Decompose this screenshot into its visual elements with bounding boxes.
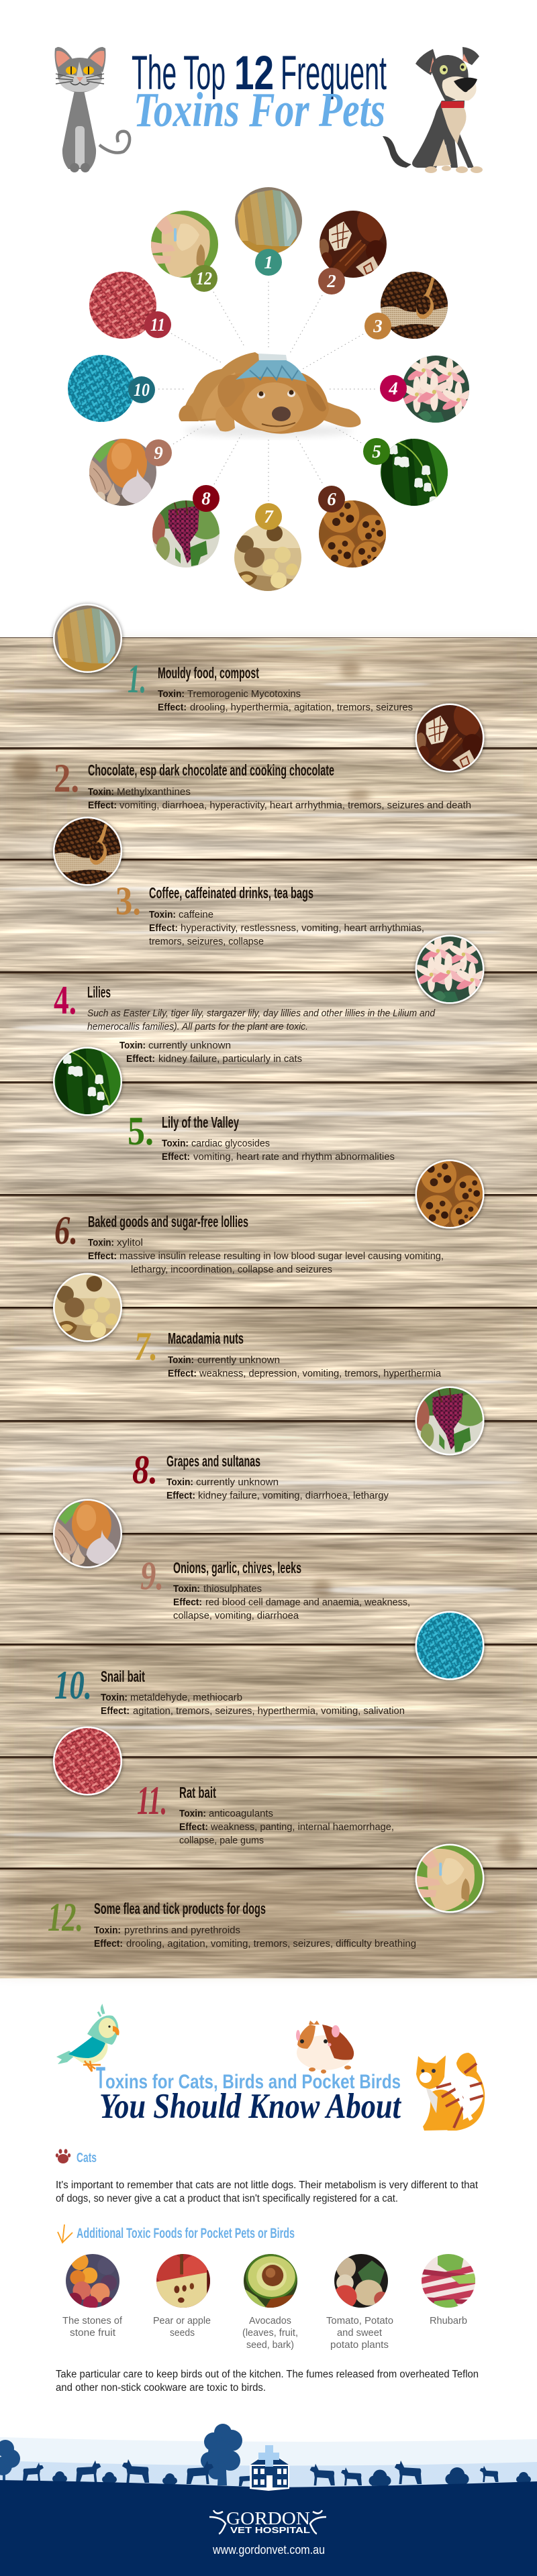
item 8: grapes text: Grapes and sultanas — [166, 1452, 260, 1470]
item 6: baked goods text: xylitol — [117, 1237, 143, 1248]
photo wheel: toxin 5 lily of the valley — [363, 438, 448, 506]
caption — [242, 2315, 298, 2351]
caption: seeds — [170, 2327, 195, 2339]
icon: grey cat — [55, 47, 130, 172]
badge 1: 1 — [264, 252, 273, 272]
item 1: mouldy food text: Mouldy food, compost — [158, 664, 259, 682]
item 10: snail bait text: 10. — [54, 1663, 92, 1707]
item 4: lilies text: Lilies — [87, 983, 111, 1001]
caption: and sweet — [337, 2327, 383, 2339]
item 10: snail bait text: Toxin: — [101, 1692, 128, 1703]
item 2: chocolate text: Chocolate, esp dark chocolate and cooking chocolate — [88, 761, 334, 779]
badge 7: 7 — [264, 506, 274, 527]
heading: additional toxic foods: Additional Toxic Foods for Pocket Pets or Birds — [77, 2226, 295, 2241]
item 10: snail bait text: agitation, tremors, seizures, hyperthermia, vomiting, salivation — [133, 1705, 405, 1717]
item 10: snail bait text — [54, 1663, 405, 1717]
item 3: coffee text: caffeine — [179, 909, 213, 920]
item 2: chocolate text: 2. — [54, 756, 79, 800]
caption: The stones of — [62, 2315, 123, 2326]
item 6: baked goods text: massive insulin release resulting in low blood sugar level causing vomiting, — [119, 1250, 444, 1262]
item 11: rat bait text: Effect: — [179, 1821, 208, 1833]
item 1: mouldy food text: Toxin: — [158, 688, 185, 700]
item 12: flea and tick text: Toxin: — [94, 1925, 121, 1936]
icon: orange bird foot — [58, 2224, 72, 2243]
section heading: T — [96, 2061, 105, 2095]
photo: chocolate — [415, 699, 485, 773]
logo: Gordon Vet Hospital: GORDON — [226, 2508, 310, 2528]
item 9: onions text: thiosulphates — [203, 1583, 262, 1595]
icon: orange cat — [416, 2053, 485, 2131]
item 8: grapes text: kidney failure, vomiting, diarrhoea, lethargy — [198, 1490, 389, 1501]
item 7: macadamia text: weakness, depression, vomiting, tremors, hyperthermia — [199, 1368, 442, 1379]
item 11: rat bait text: anticoagulants — [209, 1808, 273, 1819]
photo: grapes — [415, 1386, 487, 1456]
logo: Gordon Vet Hospital: VET HOSPITAL — [230, 2525, 310, 2535]
item 2: chocolate text: Methylxanthines — [117, 786, 191, 798]
item 5: lily of the valley text: Effect: — [162, 1151, 190, 1163]
caption — [326, 2315, 393, 2351]
item 12: flea and tick text: pyrethrins and pyrethroids — [124, 1925, 240, 1936]
food: apple seeds — [153, 2254, 213, 2339]
illustration: sick dog with ice pack — [179, 352, 360, 437]
photo wheel: toxin 2 chocolate — [318, 205, 389, 294]
photo wheel: toxin 8 grapes — [150, 485, 224, 568]
item 2: chocolate text: Effect: — [88, 800, 117, 811]
photo wheel: toxin 12 flea products — [151, 211, 218, 292]
text: birds warning — [56, 2369, 479, 2394]
title: 12 — [234, 47, 274, 100]
item 3: coffee text: Toxin: — [149, 909, 176, 920]
icon: large tree — [201, 2424, 242, 2485]
item 6: baked goods text: Baked goods and sugar-free lollies — [88, 1213, 248, 1230]
caption: Avocados — [249, 2315, 291, 2326]
item 8: grapes text: currently unknown — [196, 1477, 279, 1488]
caption: stone fruit — [70, 2327, 116, 2339]
item 10: snail bait text: metaldehyde, methiocarb — [130, 1692, 242, 1703]
item 11: rat bait text — [137, 1778, 394, 1846]
item 5: lily of the valley text: 5. — [128, 1109, 154, 1153]
badge 12: 12 — [196, 268, 212, 288]
heading: cats: Cats — [77, 2151, 97, 2165]
icon: left tree — [0, 2440, 20, 2482]
item 9: onions text: Effect: — [173, 1597, 202, 1608]
item 6: baked goods text: Effect: — [88, 1250, 117, 1262]
item 12: flea and tick text: drooling, agitation, vomiting, tremors, seizures, difficulty breathing — [126, 1938, 416, 1949]
food: tomato and potato — [326, 2254, 393, 2351]
title — [132, 47, 387, 137]
item 1: mouldy food text: drooling, hyperthermia, agitation, tremors, seizures — [190, 702, 413, 713]
photo: onions — [53, 1499, 122, 1568]
badge 4: 4 — [388, 378, 398, 398]
item 3: coffee text: tremors, seizures, collapse — [149, 936, 264, 947]
badge 8: 8 — [201, 488, 211, 508]
caption — [153, 2315, 211, 2339]
item 9: onions text: 9. — [140, 1554, 164, 1598]
item 5: lily of the valley text: Lily of the Valley — [162, 1114, 239, 1131]
badge 9: 9 — [154, 443, 163, 463]
text: birds warning: and other non-stick cookware are toxic to birds. — [56, 2382, 266, 2394]
item 7: macadamia text: currently unknown — [197, 1354, 280, 1366]
photo: snail bait — [415, 1611, 485, 1680]
photo: flea and tick products — [415, 1843, 485, 1913]
photo wheel: toxin 4 lilies — [380, 352, 476, 423]
photo wheel: toxin 6 baked goods — [318, 486, 389, 573]
section heading — [96, 2061, 402, 2126]
website url: www.gordonvet.com.au — [212, 2543, 325, 2557]
item 9: onions text: red blood cell damage and anaemia, weakness, — [205, 1597, 410, 1608]
item 10: snail bait text: Effect: — [101, 1705, 130, 1717]
photo: coffee — [53, 817, 122, 885]
icon: parrot — [56, 2006, 119, 2072]
item 7: macadamia text: Macadamia nuts — [168, 1330, 244, 1347]
item 7: macadamia text — [134, 1324, 442, 1379]
caption: Tomato, Potato — [326, 2315, 393, 2326]
item 4: lilies text — [54, 978, 436, 1065]
item 6: baked goods text: lethargy, incoordination, collapse and seizures — [131, 1264, 332, 1275]
badge 11: 11 — [150, 315, 165, 335]
toxin wheel connectors — [158, 282, 376, 501]
item 2: chocolate text: vomiting, diarrhoea, hyperactivity, heart arrhythmia, tremors, seizures and death — [119, 800, 471, 811]
item 2: chocolate text: Toxin: — [88, 786, 114, 798]
item 8: grapes text: Effect: — [166, 1490, 195, 1501]
item 12: flea and tick text — [48, 1895, 416, 1949]
item 4: lilies text: Such as Easter Lily, tiger lily, stargazer lily, day lillies and other lillies in the Lilium and — [87, 1008, 436, 1019]
item 8: grapes text — [132, 1448, 389, 1501]
item 9: onions text: collapse, vomiting, diarrhoea — [173, 1610, 299, 1621]
item 7: macadamia text: Effect: — [168, 1368, 197, 1379]
item 1: mouldy food text: 1. — [128, 657, 146, 701]
food: avocado — [242, 2254, 298, 2351]
caption: Rhubarb — [430, 2315, 467, 2326]
item 6: baked goods text — [54, 1208, 444, 1275]
food: rhubarb — [422, 2254, 475, 2326]
caption — [62, 2315, 123, 2339]
text: cats paragraph: It's important to remember that cats are not little dogs. Their metabolism is very different to that — [56, 2180, 479, 2191]
item 10: snail bait text: Snail bait — [101, 1668, 145, 1685]
icon: guinea pig — [296, 2021, 354, 2074]
icon: black and tan dog — [383, 47, 483, 173]
badge 5: 5 — [372, 441, 381, 462]
food: stone fruit — [62, 2253, 123, 2339]
section heading: You Should Know About — [99, 2087, 402, 2126]
item 9: onions text — [140, 1554, 410, 1621]
icon: paw — [56, 2149, 70, 2163]
section heading: oxins for Cats, Birds and Pocket Birds — [105, 2071, 401, 2093]
item 4: lilies text: hemerocallis families). All parts for the plant are toxic. — [87, 1021, 308, 1032]
photo wheel: toxin 10 snail bait — [68, 355, 155, 422]
item 5: lily of the valley text: cardiac glycosides — [191, 1138, 270, 1149]
item 8: grapes text: 8. — [132, 1448, 158, 1492]
text: cats paragraph: of dogs, so never give a cat a product that isn't specifically registered for a cat. — [56, 2193, 398, 2204]
silhouettes: dogs and bushes — [23, 2459, 531, 2486]
item 3: coffee text: Coffee, caffeinated drinks, tea bags — [149, 884, 313, 902]
item 12: flea and tick text: Effect: — [94, 1938, 123, 1949]
item 5: lily of the valley text: vomiting, heart rate and rhythm abnormalities — [193, 1151, 395, 1163]
photo: rat bait — [53, 1727, 122, 1795]
photo wheel: toxin 1 mouldy food — [235, 187, 302, 276]
footer landscape — [0, 2424, 537, 2576]
badge 3: 3 — [373, 316, 383, 336]
item 3: coffee text: 3. — [115, 879, 141, 923]
item 11: rat bait text: Rat bait — [179, 1784, 216, 1801]
title: The Top — [132, 47, 226, 100]
title: Toxins For Pets — [134, 83, 385, 137]
photo: lilies — [414, 933, 489, 1004]
photo wheel: toxin 3 coffee — [364, 272, 448, 339]
item 11: rat bait text: 11. — [137, 1778, 167, 1823]
caption: (leaves, fruit, — [242, 2327, 298, 2339]
wood plank background — [0, 637, 537, 1978]
item 1: mouldy food text — [128, 657, 413, 713]
badge 2: 2 — [326, 271, 336, 291]
title: Frequent — [281, 47, 387, 100]
photo: lily of the valley — [53, 1046, 122, 1116]
caption: potato plants — [330, 2339, 389, 2351]
item 5: lily of the valley text: Toxin: — [162, 1138, 189, 1149]
ground — [0, 2480, 537, 2576]
caption: Pear or apple — [153, 2315, 211, 2326]
item 12: flea and tick text: Some flea and tick products for dogs — [94, 1900, 266, 1917]
item 1: mouldy food text: Effect: — [158, 702, 187, 713]
logo: Gordon Vet Hospital — [209, 2508, 326, 2535]
caption: seed, bark) — [246, 2339, 294, 2351]
item 11: rat bait text: Toxin: — [179, 1808, 206, 1819]
item 4: lilies text: Toxin: — [119, 1040, 146, 1051]
item 5: lily of the valley text — [128, 1109, 395, 1163]
item 3: coffee text: hyperactivity, restlessness, vomiting, heart arrhythmias, — [181, 922, 424, 934]
item 7: macadamia text: 7. — [134, 1324, 158, 1368]
item 3: coffee text: Effect: — [149, 922, 178, 934]
item 4: lilies text: 4. — [54, 978, 77, 1022]
item 4: lilies text: currently unknown — [148, 1040, 231, 1051]
item 2: chocolate text — [54, 756, 471, 811]
item 6: baked goods text: 6. — [54, 1208, 78, 1252]
item 9: onions text: Toxin: — [173, 1583, 200, 1595]
text: cats paragraph — [56, 2180, 479, 2204]
photo: baked goods — [415, 1157, 485, 1232]
item 7: macadamia text: Toxin: — [168, 1354, 194, 1366]
photo: mouldy food — [53, 604, 122, 673]
item 1: mouldy food text: Tremorogenic Mycotoxins — [187, 688, 301, 700]
item 11: rat bait text: collapse, pale gums — [179, 1835, 264, 1846]
photo wheel: toxin 11 rat bait — [89, 272, 171, 339]
item 4: lilies text: kidney failure, particularly in cats — [158, 1053, 302, 1065]
photo wheel: toxin 9 onions — [89, 437, 172, 506]
item 11: rat bait text: weakness, panting, internal haemorrhage, — [210, 1821, 394, 1833]
badge 4 — [380, 375, 407, 402]
photo wheel: toxin 7 macadamia — [234, 503, 301, 591]
photo: macadamia nuts — [53, 1273, 122, 1342]
item 4: lilies text: Effect: — [126, 1053, 155, 1065]
text: birds warning: Take particular care to keep birds out of the kitchen. The fumes released from overheated Teflon — [56, 2369, 479, 2380]
item 3: coffee text — [115, 879, 424, 947]
badge 10: 10 — [134, 380, 150, 400]
icon: vet hospital building — [250, 2445, 289, 2491]
item 12: flea and tick text: 12. — [48, 1895, 83, 1939]
item 8: grapes text: Toxin: — [166, 1477, 193, 1488]
item 6: baked goods text: Toxin: — [88, 1237, 114, 1248]
item 9: onions text: Onions, garlic, chives, leeks — [173, 1559, 301, 1576]
badge 6: 6 — [327, 489, 336, 509]
